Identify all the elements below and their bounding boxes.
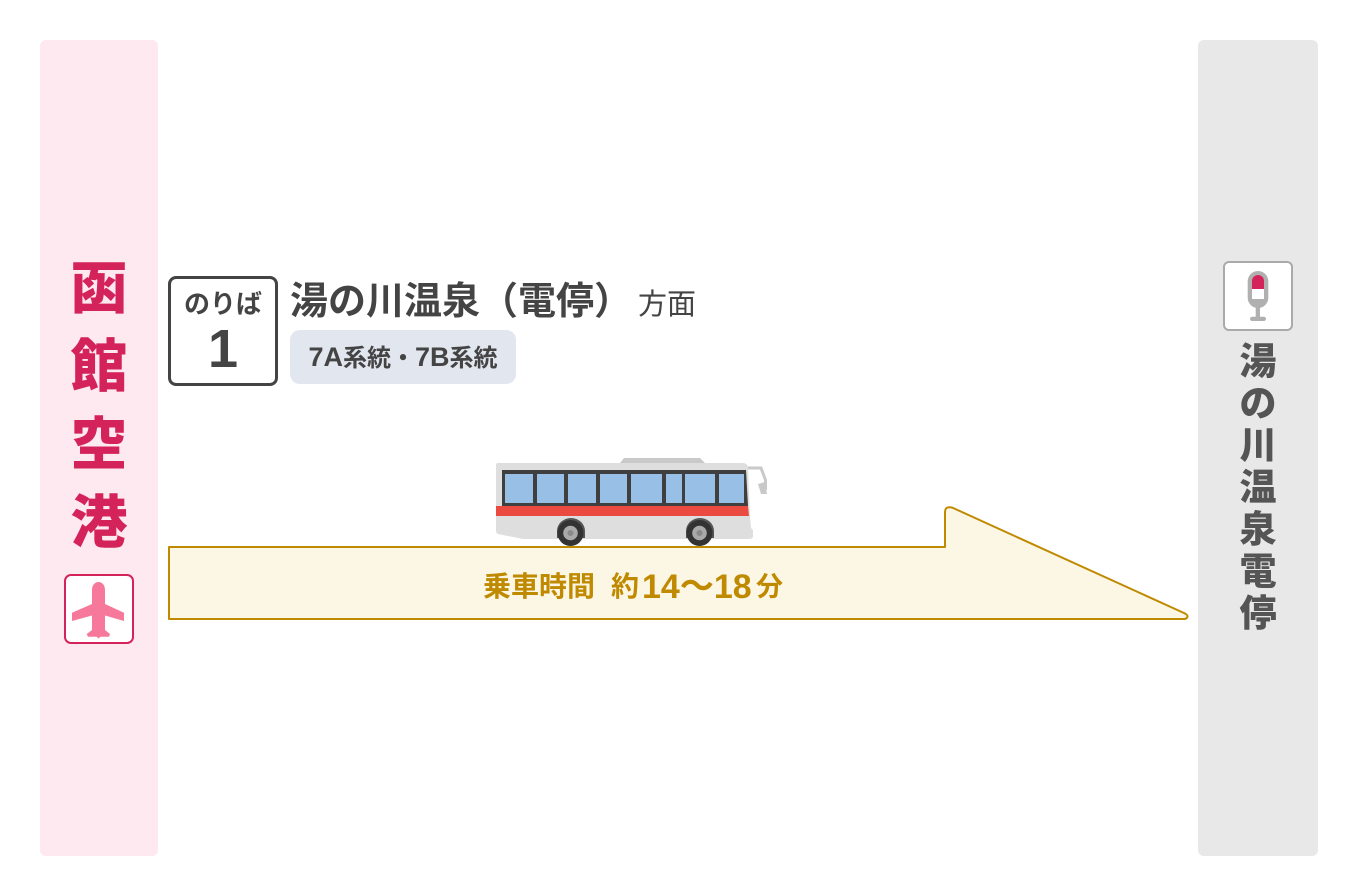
roof unit: [620, 458, 705, 463]
heading: arrival stop name: 泉: [1240, 509, 1276, 550]
body: [496, 463, 753, 539]
panel: departure stop, Hakodate Airport: [40, 40, 158, 856]
window frame: [502, 470, 748, 506]
tag: route numbers: 7A系統・7B系統: [308, 342, 498, 372]
tag: route numbers: [290, 330, 516, 384]
text: ride time: 乗車時間: [483, 571, 595, 602]
windows: [505, 474, 744, 503]
text: ride time: 約: [611, 571, 639, 602]
number: platform number: 1: [208, 319, 238, 379]
heading: arrival stop name: 川: [1240, 425, 1276, 466]
badge: boarding platform 1: [168, 276, 278, 386]
heading: departure stop name: 港: [70, 491, 128, 555]
text: ride time: 14〜18: [642, 568, 752, 606]
heading: departure stop name: [70, 257, 128, 555]
heading: arrival stop name: 停: [1240, 593, 1276, 634]
heading: arrival stop name: 湯: [1240, 341, 1276, 382]
text: ride time: 分: [756, 572, 783, 602]
icon: airplane: [64, 574, 134, 644]
heading: departure stop name: 館: [70, 335, 128, 399]
label: platform: のりば: [184, 289, 262, 319]
red stripe: [496, 506, 749, 516]
panel: arrival stop, Yunokawa Onsen tram stop: [1198, 40, 1318, 856]
heading: arrival stop name: [1240, 341, 1276, 634]
heading: arrival stop name: 温: [1240, 467, 1276, 508]
wheels: [557, 518, 714, 546]
text: ride time: [483, 568, 783, 606]
icon: stop marker: [1223, 261, 1293, 331]
heading: departure stop name: 函: [70, 257, 128, 321]
heading: arrival stop name: の: [1240, 383, 1276, 424]
arrow: ride direction: [168, 506, 1189, 620]
text: destination: 湯の川温泉（電停）方面: [290, 281, 696, 323]
heading: arrival stop name: 電: [1240, 551, 1276, 592]
illustration: bus: [496, 458, 767, 546]
heading: departure stop name: 空: [70, 413, 128, 477]
mirror: [747, 468, 766, 490]
